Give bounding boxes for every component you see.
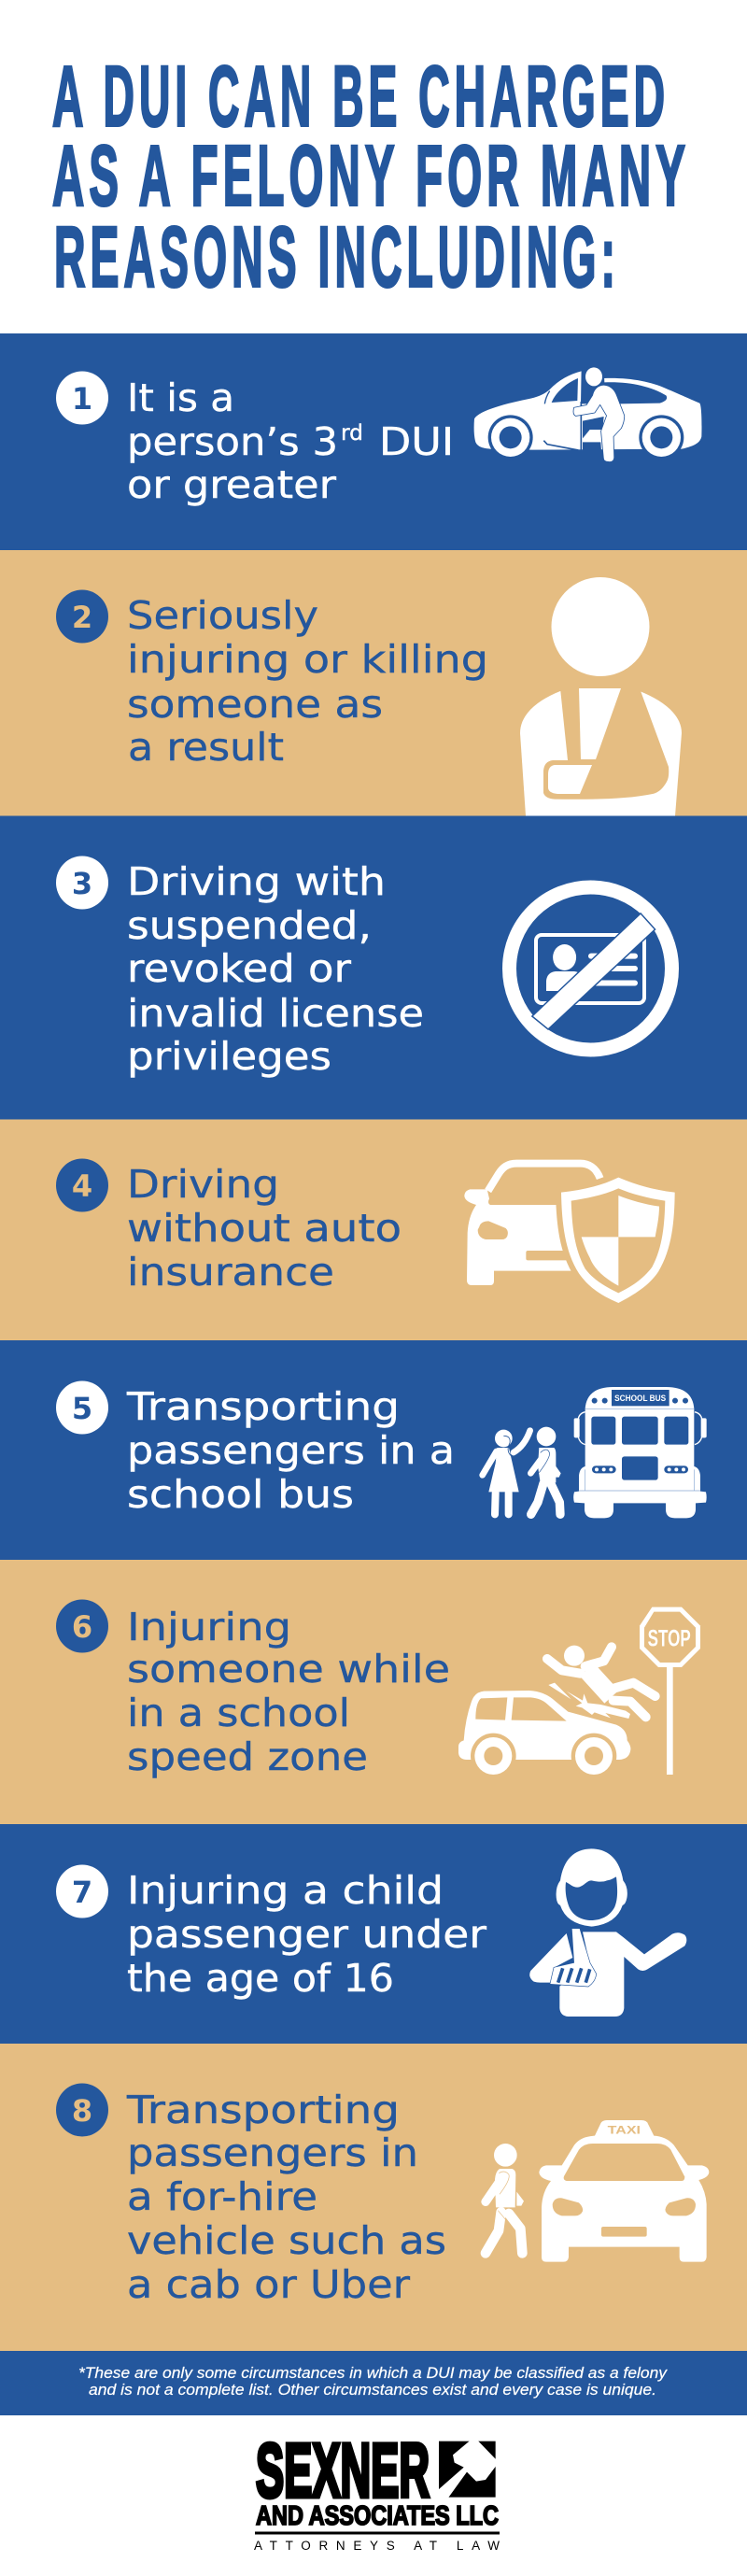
icon: children and school bus: SCHOOL BUS (614, 1394, 666, 1403)
text: reason 2: someone as (127, 682, 383, 727)
text: reason 7: passenger under (127, 1912, 486, 1957)
panel: reason 1 (0, 333, 747, 550)
text: reason 2: a result (128, 725, 284, 770)
icon: gavel (438, 2441, 496, 2498)
text: reason 3 (127, 859, 424, 1079)
number badge 2: 2 (72, 600, 92, 635)
text: reason 8: passengers in (127, 2130, 418, 2175)
text: reason 7: Injuring a child (127, 1868, 444, 1913)
icon: car and insurance shield (464, 1164, 675, 1303)
panel: reason 8 (0, 2044, 747, 2351)
text: reason 6 (127, 1605, 450, 1779)
footer disclaimer: and is not a complete list. Other circumstances exist and every case is unique. (89, 2382, 656, 2399)
text: reason 6: someone while (127, 1647, 450, 1691)
text: reason 8: vehicle such as (127, 2218, 446, 2263)
logo: Sexner and Associates LLC: AND ASSOCIATES LLC (256, 2501, 499, 2531)
text: reason 4: Driving (127, 1162, 279, 1207)
icon: person getting out of car (474, 367, 701, 461)
panel: reason 6 (0, 1560, 747, 1824)
text: reason 1: rd (341, 421, 363, 446)
panel: reason 5 (0, 1340, 747, 1560)
text: reason 7: the age of 16 (127, 1956, 394, 2001)
text: reason 5 (126, 1384, 455, 1517)
number badge 7 (56, 1864, 108, 1918)
footer disclaimer (0, 2351, 747, 2415)
text: reason 1: DUI (379, 419, 454, 464)
text: reason 8: Transporting (126, 2088, 400, 2132)
text: reason 8: a cab or Uber (127, 2262, 410, 2307)
title (52, 49, 690, 304)
number badge 3 (56, 856, 108, 910)
panel: reason 4 (0, 1119, 747, 1340)
icon: passenger and taxi (486, 2120, 709, 2262)
text: reason 3: revoked or (127, 946, 351, 991)
icon: person with arm in sling (520, 577, 682, 816)
icon: passenger and taxi: TAXI (608, 2123, 641, 2136)
icon: children and school bus (483, 1387, 707, 1518)
text: reason 6: Injuring (127, 1605, 291, 1649)
logo: Sexner and Associates LLC: SEXNER (256, 2428, 430, 2513)
icon: car hitting pedestrian near stop sign (458, 1607, 700, 1778)
number badge 6: 6 (72, 1609, 92, 1645)
text: reason 2: injuring or killing (127, 637, 488, 682)
logo: Sexner and Associates LLC (254, 2428, 500, 2553)
text: reason 4: without auto (127, 1206, 402, 1251)
text: reason 7 (127, 1868, 486, 2001)
number badge 4 (56, 1158, 108, 1212)
footer disclaimer: *These are only some circumstances in which a DUI may be classified as a felony (78, 2365, 669, 2382)
text: reason 1 (127, 375, 454, 507)
panel: reason 7 (0, 1824, 747, 2044)
text: reason 6: speed zone (127, 1734, 368, 1779)
number badge 5 (56, 1380, 108, 1435)
number badge 1: 1 (72, 381, 92, 417)
number badge 5: 5 (72, 1391, 92, 1426)
number badge 4: 4 (72, 1168, 92, 1204)
number badge 7: 7 (72, 1875, 92, 1910)
icon: car hitting pedestrian near stop sign: STOP (648, 1626, 691, 1651)
text: reason 1: person’s 3 (127, 419, 338, 464)
number badge 8 (56, 2083, 108, 2137)
text: reason 5: passengers in a (127, 1428, 455, 1473)
number badge 6 (56, 1599, 108, 1653)
icon: prohibited license (510, 887, 672, 1050)
text: reason 8 (126, 2088, 446, 2307)
text: reason 3: suspended, (127, 903, 372, 948)
text: reason 4 (127, 1162, 402, 1295)
number badge 1 (56, 372, 108, 424)
text: reason 5: Transporting (126, 1384, 400, 1429)
text: reason 1: It is a (127, 375, 234, 420)
panel: reason 3 (0, 816, 747, 1119)
logo: Sexner and Associates LLC: ATTORNEYS AT LAW (254, 2539, 500, 2553)
number badge 2 (56, 590, 108, 643)
text: reason 2: Seriously (127, 593, 318, 638)
text: reason 6: in a school (127, 1691, 350, 1735)
text: reason 3: Driving with (127, 859, 386, 904)
text: reason 8: a for-hire (127, 2174, 317, 2219)
text: reason 1: or greater (127, 462, 336, 507)
panel: reason 2 (0, 550, 747, 816)
text: reason 3: invalid license (127, 991, 424, 1036)
number badge 8: 8 (72, 2093, 92, 2129)
text: reason 4: insurance (127, 1250, 334, 1295)
text: reason 2 (127, 593, 488, 770)
number badge 3: 3 (72, 866, 92, 901)
icon: child with arm cast (529, 1848, 686, 2017)
text: reason 5: school bus (127, 1472, 354, 1517)
text: reason 3: privileges (127, 1034, 331, 1079)
